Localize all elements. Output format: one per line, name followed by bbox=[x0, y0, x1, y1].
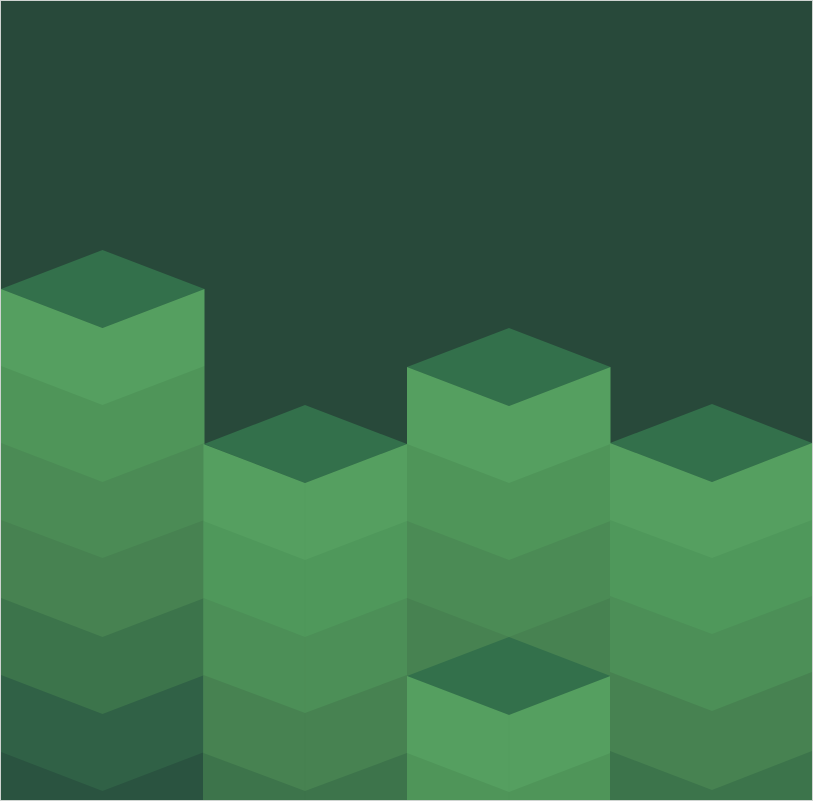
column 3 layer 1 bbox=[407, 367, 610, 800]
column 4 top face bbox=[610, 404, 812, 482]
column 3 bbox=[407, 328, 610, 800]
column 4 layer 4 bbox=[610, 672, 812, 800]
column 2 top face bbox=[204, 405, 407, 483]
column 1 layer 5 bbox=[1, 598, 204, 800]
column 4 bbox=[610, 404, 812, 800]
small cube top face bbox=[407, 637, 610, 715]
column 1 bbox=[1, 250, 204, 800]
column 3 layer 3 bbox=[407, 521, 610, 800]
column 2 bbox=[203, 405, 407, 800]
column 1 layer 7 bbox=[1, 752, 204, 800]
column 4 layer 2 bbox=[610, 520, 812, 800]
column 3 layer 2 bbox=[407, 444, 610, 800]
column 2 layer 2 bbox=[203, 521, 407, 800]
small cube layer 2 bbox=[407, 753, 610, 800]
column 1 layer 3 bbox=[1, 443, 204, 800]
column 2 layer 4 bbox=[203, 675, 407, 800]
column 2 layer 1 bbox=[203, 444, 407, 800]
column 3 layer 4 bbox=[407, 598, 610, 800]
small front cube bbox=[407, 637, 610, 800]
column 2 layer 3 bbox=[203, 598, 407, 800]
small cube layer 1 bbox=[407, 676, 610, 800]
column 1 top face bbox=[1, 250, 204, 328]
column 1 layer 6 bbox=[1, 675, 204, 800]
column 4 layer 3 bbox=[610, 596, 812, 800]
column 4 layer 5 bbox=[610, 751, 812, 800]
column 1 layer 4 bbox=[1, 520, 204, 800]
column 4 layer 1 bbox=[610, 443, 812, 800]
column 2 layer 5 bbox=[203, 753, 407, 800]
column 1 layer 1 bbox=[1, 289, 204, 800]
column 3 top face bbox=[407, 328, 610, 406]
column 1 layer 2 bbox=[1, 366, 204, 800]
